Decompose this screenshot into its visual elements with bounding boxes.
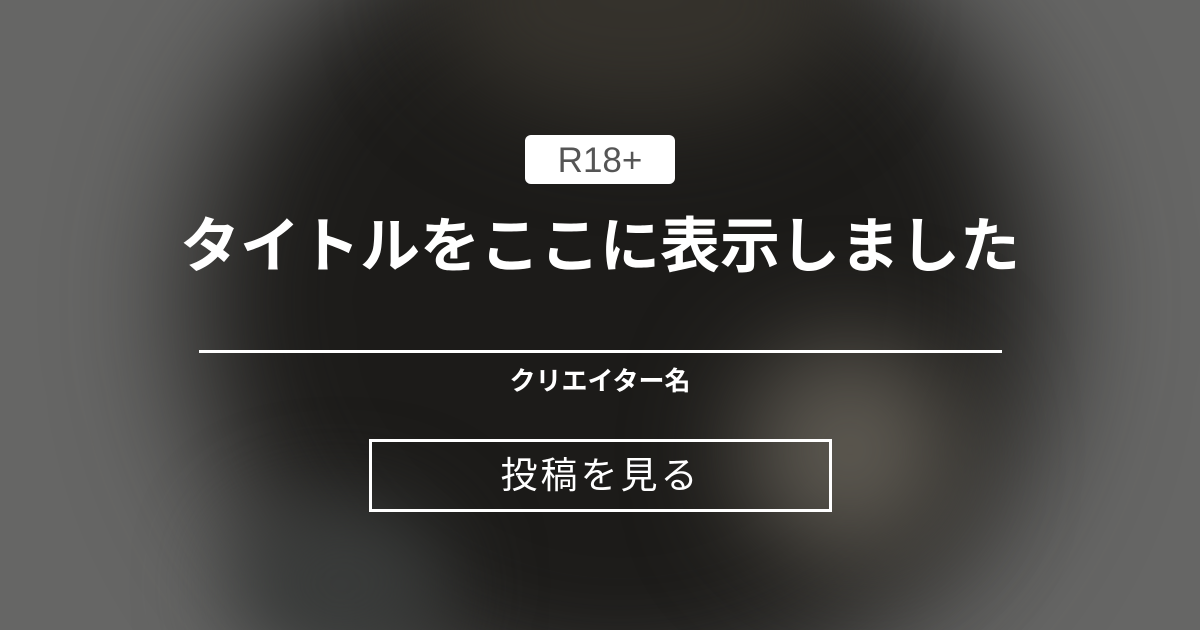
badge: rating: R18+	[558, 141, 642, 180]
button: view post: 投稿を見る	[500, 455, 700, 496]
divider line	[199, 350, 1002, 353]
badge: rating	[525, 135, 675, 184]
button: view post	[369, 439, 832, 512]
creator name placeholder: クリエイター名	[510, 366, 690, 396]
title placeholder: タイトルをここに表示しました	[180, 213, 1020, 280]
